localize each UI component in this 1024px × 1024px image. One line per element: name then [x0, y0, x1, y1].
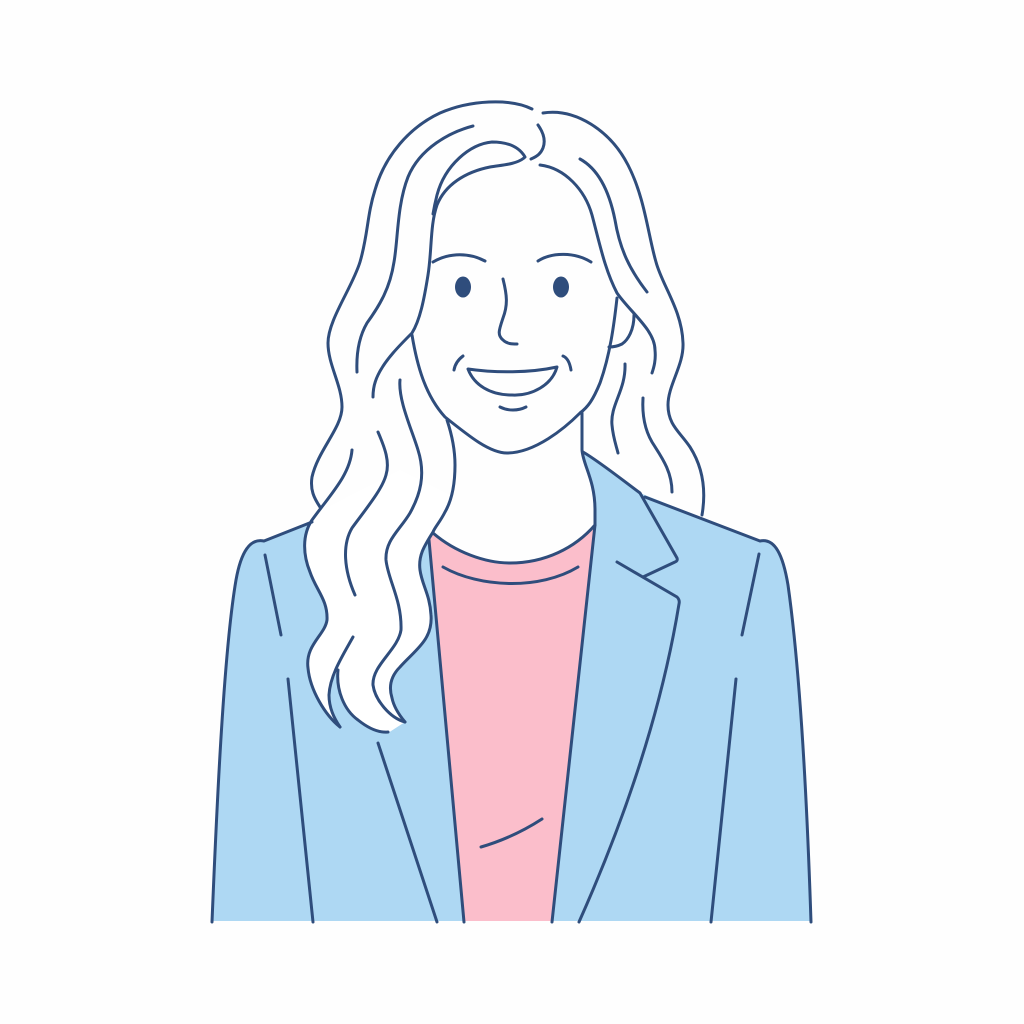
- blazer fill: [213, 452, 811, 921]
- white hair fill over blazer: [305, 470, 450, 733]
- shirt fold: [481, 819, 542, 847]
- blazer lines: [212, 522, 312, 922]
- neck: [582, 413, 595, 525]
- pink shirt: [429, 525, 595, 921]
- face: [412, 254, 634, 453]
- shirt collar: [433, 525, 595, 563]
- hair outlines: [305, 102, 704, 732]
- line work: [212, 102, 811, 922]
- eyes: [455, 276, 569, 298]
